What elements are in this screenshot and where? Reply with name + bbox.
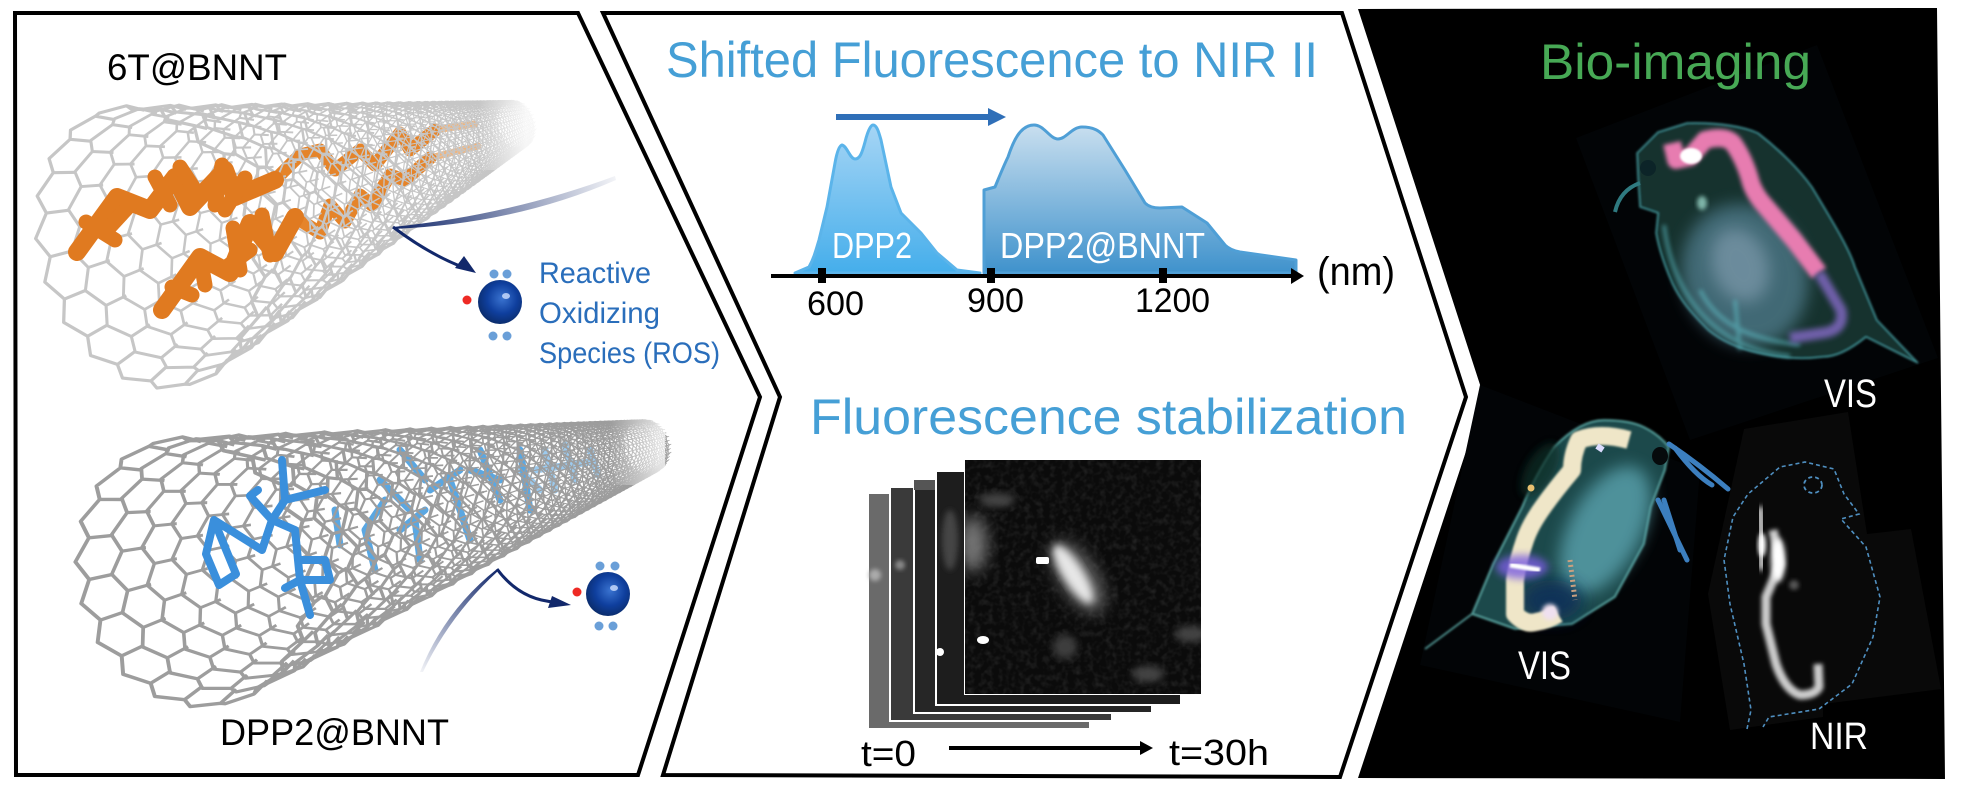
icon: ROS sphere 1 (462, 270, 522, 340)
label: VIS top: VIS (1824, 372, 1877, 416)
time labels and arrow (861, 732, 1269, 774)
panel: fluorescence (603, 13, 1466, 777)
spectrum labels: (nm) (1317, 250, 1395, 294)
text: Reactive Oxidizing Species: Oxidizing (539, 297, 660, 330)
image stack (869, 459, 1207, 728)
arrow: ROS generation tube 1 (393, 176, 616, 273)
spectrum labels: 600 (807, 285, 864, 323)
label: 6T@BNNT: 6T@BNNT (107, 47, 287, 88)
panel: bio-imaging (1358, 8, 1945, 779)
daphnia: VIS bottom (1420, 385, 1728, 722)
daphnia: NIR image (1708, 412, 1941, 730)
label: VIS bottom: VIS (1518, 644, 1571, 688)
time labels and arrow: t=0 (861, 733, 916, 774)
spectrum labels: DPP2@BNNT (1000, 225, 1205, 266)
far DPP2 molecules behind the lattice (335, 445, 598, 570)
text: Reactive Oxidizing Species: Species (ROS) (539, 337, 720, 370)
tube 1 far-end fade (478, 85, 538, 170)
spectrum axis (771, 268, 1304, 284)
arrow: ROS generation tube 2 (420, 569, 571, 672)
frame: t=30h (959, 459, 1207, 695)
spectrum labels: 1200 (1135, 282, 1210, 320)
nanotube 1 lattice (0, 0, 580, 418)
icon: ROS sphere 2 (572, 562, 630, 630)
spectrum: DPP2 (795, 125, 980, 273)
time labels and arrow: t=30h (1169, 732, 1269, 773)
tube 2 far-end fade (610, 405, 665, 485)
nanotube 2 lattice (45, 310, 706, 734)
panel: nanotube structures (0, 0, 760, 775)
title: Shifted Fluorescence: Shifted Fluorescence to NIR II (666, 32, 1318, 88)
near oligothiophene molecules (77, 165, 295, 310)
near DPP2 molecule (206, 460, 330, 615)
text: Reactive Oxidizing Species: Reactive (539, 257, 651, 290)
far oligothiophene chains behind the lattice (275, 124, 478, 233)
label: NIR: NIR (1810, 716, 1868, 758)
spectrum labels (807, 225, 1395, 323)
spectrum labels: 900 (967, 282, 1024, 320)
label: DPP2@BNNT: DPP2@BNNT (220, 712, 449, 753)
spectrum labels: DPP2 (832, 225, 912, 266)
title: Fluorescence stabilization: Fluorescence stabilization (810, 389, 1407, 445)
arrow: red shift (836, 108, 1006, 126)
daphnia: VIS top (1576, 45, 1938, 440)
spectrum: DPP2@BNNT (984, 125, 1296, 273)
title: Bio-imaging: Bio-imaging (1540, 34, 1811, 90)
text: Reactive Oxidizing Species (539, 257, 720, 370)
